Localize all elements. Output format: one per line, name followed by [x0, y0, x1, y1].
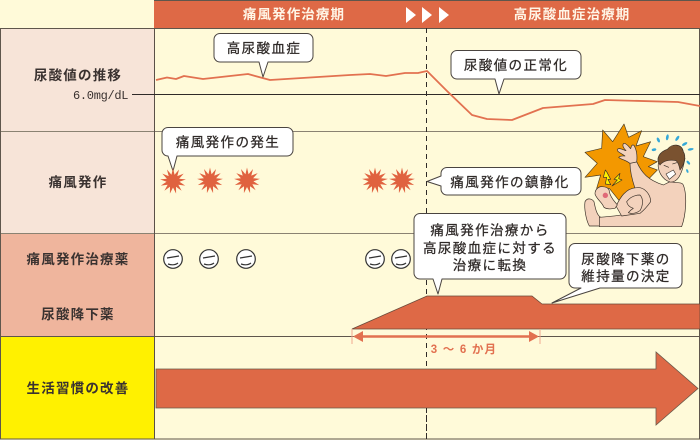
lightning bolts	[603, 170, 611, 185]
duration arrow 3 to 6 months	[352, 329, 540, 356]
row background: medication labels	[1, 233, 154, 336]
callout: attack subsided	[427, 168, 581, 195]
callout: uric acid normalised: 尿酸値の正常化	[464, 58, 568, 73]
callout: switch of treatment: 高尿酸血症に対する	[423, 240, 557, 256]
face	[658, 155, 685, 182]
hair	[658, 145, 685, 170]
raised knee leg	[616, 188, 651, 216]
sore foot	[595, 187, 617, 209]
eyes	[664, 163, 677, 167]
uric acid line chart	[156, 71, 700, 120]
dashed transition line	[426, 28, 428, 439]
header arrows	[406, 7, 449, 23]
dashed line below arrow	[426, 408, 428, 439]
callout: switch of treatment	[414, 214, 566, 294]
callout: switch of treatment: 治療に転換	[453, 258, 527, 273]
callout: high uric acid	[214, 34, 313, 77]
duration label: 3 ～ 6 か月	[431, 343, 497, 356]
callout: maintenance dose decision: 尿酸降下薬の	[581, 252, 671, 267]
pills	[164, 250, 410, 268]
header band	[154, 0, 700, 28]
row label: gout attack: 痛風発作	[49, 175, 107, 190]
callout: high uric acid: 高尿酸血症	[227, 40, 301, 56]
threshold label: 6.0mg/dL	[73, 89, 128, 103]
pain burst	[585, 124, 657, 202]
header: gout attack treatment period: 痛風発作治療期	[243, 6, 345, 22]
callout: attack subsided: 痛風発作の鎮静化	[450, 174, 570, 190]
chart background	[154, 1, 700, 439]
row background: uric acid and gout attack labels	[1, 28, 154, 233]
row background: lifestyle label	[1, 336, 154, 439]
body and raised arm	[599, 162, 686, 227]
urate-lowering dose shape	[352, 296, 700, 329]
threshold line	[132, 94, 700, 96]
callout: maintenance dose decision	[552, 244, 682, 303]
header: hyperuricemia treatment period: 高尿酸血症治療期	[514, 6, 630, 22]
callout: switch of treatment: 痛風発作治療から	[430, 222, 550, 238]
callout: maintenance dose decision: 維持量の決定	[581, 269, 671, 284]
callout: gout attack onset	[162, 128, 293, 171]
attack markers	[160, 168, 415, 194]
inflamed toe	[603, 193, 608, 198]
row label: uric acid trend: 尿酸値の推移	[34, 67, 122, 83]
far foot	[585, 199, 601, 226]
lifestyle improvement arrow	[156, 352, 698, 425]
sweat drops	[651, 134, 694, 173]
holding hand	[627, 195, 642, 213]
raised hand	[617, 143, 637, 163]
row label: lifestyle improvement: 生活習慣の改善	[27, 380, 129, 396]
row label: urate-lowering medication: 尿酸降下薬	[41, 306, 115, 322]
illustration: man in pain holding foot	[585, 124, 694, 227]
teeth	[666, 170, 676, 179]
callout: gout attack onset: 痛風発作の発生	[176, 134, 280, 150]
row label: gout attack medication: 痛風発作治療薬	[27, 251, 129, 267]
callout: uric acid normalised	[451, 50, 581, 94]
